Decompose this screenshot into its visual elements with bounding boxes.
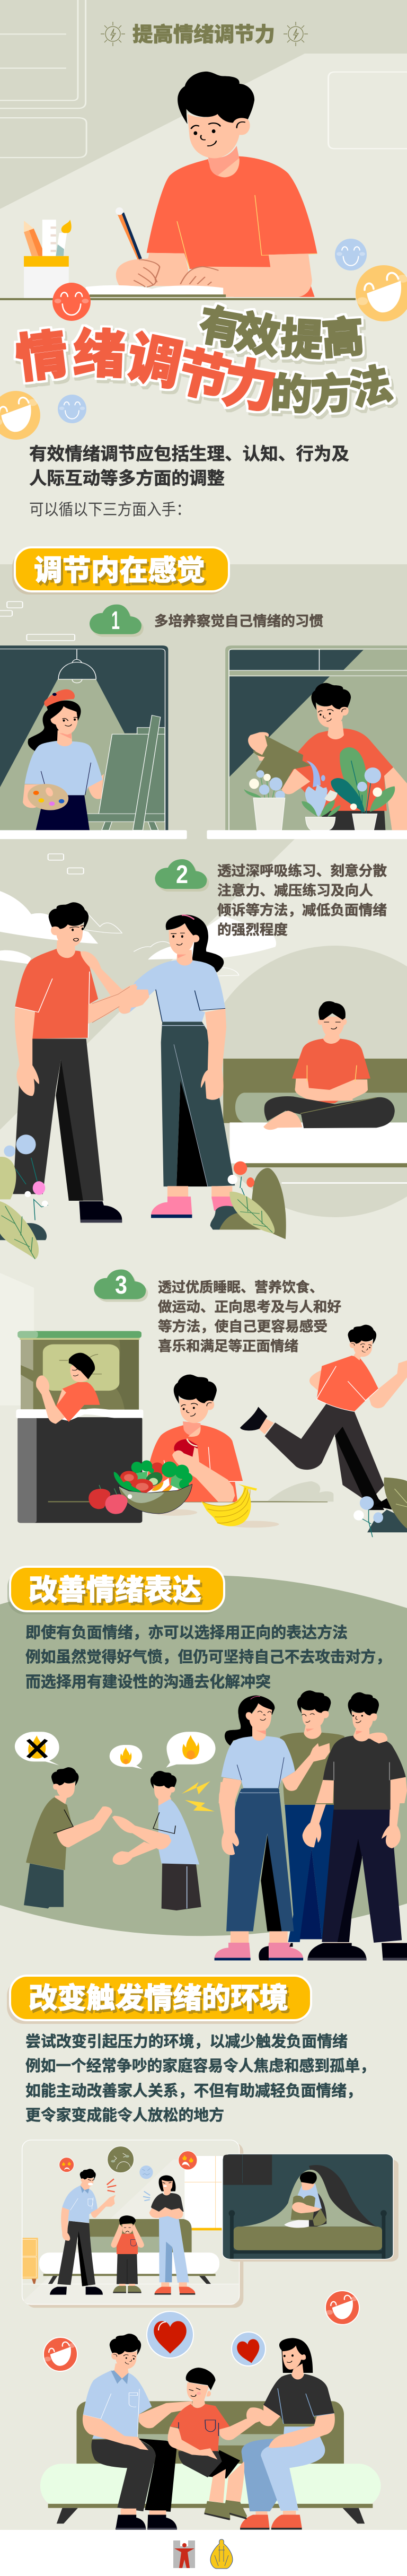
- section three paragraph: 尝试改变引起压力的环境，以减少触发负面情绪: [25, 2033, 348, 2050]
- main title: 节: [171, 342, 235, 411]
- man eating: [143, 1375, 243, 1502]
- illustration: three friends: [215, 1690, 407, 1960]
- man in olive shirt: [280, 1690, 344, 1804]
- palette: [22, 780, 74, 814]
- main title: 效: [232, 307, 283, 363]
- sad child: [284, 2172, 326, 2228]
- speech bubble: small flame: [110, 1745, 142, 1769]
- background: section two sage band: [0, 1575, 407, 1936]
- right arguing man: [151, 1771, 176, 1807]
- step 3 text: 等方法，使自己更容易感受: [158, 1318, 328, 1334]
- woman standing: [81, 915, 235, 1186]
- dad: [83, 2334, 192, 2530]
- section heading: 改变触发情绪的环境: 改变触发情绪的环境: [29, 1983, 288, 2014]
- background: lighter slab: [0, 1273, 34, 1405]
- hero illustration: man writing at desk: [24, 72, 317, 298]
- speech bubble: crossed out flame: [15, 1732, 59, 1766]
- top outlined decoration: [0, 0, 407, 158]
- illustration: man eating with salad and banana: [114, 1375, 257, 1526]
- step 3 badge: [94, 1270, 148, 1302]
- section three paragraph: [25, 2033, 375, 2124]
- intro paragraph: 有效情绪调节应包括生理、认知、行为及: [29, 444, 349, 464]
- meditating man: [263, 1001, 395, 1130]
- section two paragraph: [25, 1624, 391, 1691]
- background: section one band: [0, 564, 407, 1130]
- main title: 的: [269, 370, 313, 418]
- step 2 text: 倾诉等方法，减低负面情绪: [217, 902, 387, 918]
- illustration: arguing pair with speech bubbles: [15, 1732, 216, 1807]
- step 2 text: 透过深呼吸练习、刻意分散: [217, 863, 387, 879]
- plants bottom left: [0, 1134, 48, 1259]
- step 1 text: 多培养察觉自己情绪的习惯: [154, 613, 323, 629]
- step 2 badge: 2: [176, 861, 188, 889]
- icon: lightning bolts: [182, 1781, 215, 1811]
- step 3 text: [158, 1279, 341, 1354]
- background: round hill: [199, 946, 407, 1217]
- logo: yellow hands: [210, 2539, 233, 2569]
- arguing mum: [149, 2175, 195, 2295]
- banana: [201, 1484, 257, 1526]
- step 3 badge: 3: [115, 1271, 127, 1299]
- intro paragraph: 人际互动等多方面的调整: [29, 468, 225, 488]
- main title: 方: [309, 370, 353, 418]
- main title: 力: [218, 352, 281, 421]
- shelf line and soft shadows: [48, 1481, 333, 1527]
- mum: [240, 2338, 335, 2530]
- small outlined decoration: [0, 601, 84, 874]
- emoji: orange laugh: [356, 265, 407, 321]
- man: [116, 72, 317, 297]
- section heading: 改善情绪表达: 改善情绪表达: [29, 1574, 201, 1606]
- step 1 badge: [90, 605, 144, 637]
- salad bowl: [114, 1460, 192, 1514]
- main title: 法: [346, 360, 396, 414]
- emoji: blue worried: [139, 2165, 153, 2179]
- lamp: [58, 649, 96, 683]
- icon: light bulb right: [284, 22, 308, 46]
- clouds behind people: [0, 891, 276, 976]
- illustration: comforting couple: [13, 902, 235, 1222]
- friends lower bodies: [215, 1782, 407, 1960]
- emoji: red smile: [52, 283, 91, 321]
- sofa: [39, 2219, 219, 2284]
- apples: [89, 1485, 128, 1514]
- shouting marks: [107, 2179, 116, 2192]
- plants bottom right of section: [210, 1162, 286, 1239]
- panel: quarrelling family: [22, 2140, 243, 2308]
- man in black shirt: [316, 1692, 407, 1810]
- gardener: [248, 683, 407, 830]
- panel: lonely child under blanket: [223, 2154, 399, 2261]
- emoji: angry red left: [59, 2158, 74, 2172]
- son: [168, 2368, 263, 2520]
- section three paragraph: 更令家变成能令人放松的地方: [25, 2107, 224, 2124]
- friends upper bodies: [219, 1690, 407, 1810]
- emoji: blue smile left: [58, 395, 86, 423]
- arguing man bodies: [24, 1797, 201, 1910]
- illustration: sleeping man in bed: [16, 1331, 143, 1523]
- step 3 text: 透过优质睡眠、营养饮食、: [158, 1279, 323, 1295]
- step 2 text: [217, 863, 387, 938]
- section three paragraph: 如能主动改善家人关系，不但有助减轻负面情绪，: [25, 2082, 362, 2100]
- section two paragraph: 而选择用有建设性的沟通去化解冲突: [25, 1673, 271, 1691]
- step 2 badge: [155, 859, 209, 892]
- easel: [86, 715, 165, 830]
- angry dad: [50, 2169, 116, 2295]
- main title: 高: [320, 313, 366, 363]
- main title: [13, 301, 396, 421]
- icon: heart big: [147, 2311, 193, 2358]
- top label: 提高情绪调节力: 提高情绪调节力: [132, 24, 275, 46]
- window sill left: [0, 830, 187, 839]
- emoji: orange laugh left: [0, 391, 40, 440]
- main title: 绪: [72, 324, 126, 385]
- icon: heart small: [232, 2332, 266, 2366]
- step 2 text: 注意力、减压练习及向人: [217, 883, 373, 898]
- step 3 text: 做运动、正向思考及与人和好: [158, 1299, 341, 1315]
- section two paragraph: 例如虽然觉得好气愤，但仍可坚持自己不去攻击对方，: [25, 1648, 391, 1666]
- painter: [22, 689, 104, 830]
- emoji: red laugh left: [43, 2337, 77, 2371]
- ankles and shoes of woman: [151, 1186, 235, 1218]
- desk line: [0, 298, 356, 300]
- section heading: 调节内在感觉: [12, 547, 229, 595]
- man standing: [13, 902, 122, 1222]
- logo: grey H with red figure: [173, 2540, 195, 2568]
- intro paragraph: [29, 444, 349, 519]
- top label: 提高情绪调节力: [101, 22, 308, 46]
- section heading: 改善情绪表达: [7, 1567, 224, 1614]
- main title: 情: [13, 325, 71, 389]
- emoji: olive frown: [108, 2146, 134, 2173]
- panel: painter window: [0, 645, 187, 839]
- section heading: 改变触发情绪的环境: [7, 1976, 311, 2024]
- window sill right: [207, 830, 407, 839]
- emoji: red laugh right: [325, 2291, 359, 2325]
- section three paragraph: 例如一个经常争吵的家庭容易令人焦虑和感到孤单，: [25, 2057, 375, 2075]
- plants beside runner: [353, 1478, 407, 1537]
- illustration: running man: [240, 1325, 407, 1510]
- emoji: blue smile top: [335, 239, 367, 270]
- background: top diagonal block: [0, 0, 407, 209]
- emoji: angry red right: [179, 2151, 197, 2170]
- step 2 text: 的强烈程度: [217, 922, 288, 938]
- book: [86, 285, 226, 297]
- covering ears son: [111, 2215, 144, 2293]
- intro paragraph: 可以循以下三方面入手：: [29, 501, 191, 519]
- step 1 badge: 1: [111, 607, 120, 635]
- main title: 有: [196, 301, 245, 355]
- sofa: [40, 2401, 381, 2523]
- sleeper: [36, 1353, 100, 1424]
- potted plants: [244, 747, 395, 830]
- icon: light bulb left: [101, 22, 125, 46]
- section two paragraph: 即使有负面情绪，亦可以选择用正向的表达方法: [25, 1624, 348, 1641]
- panel: gardener window: [207, 645, 407, 839]
- speech bubble: large flame: [166, 1732, 216, 1768]
- cabinet: [23, 2238, 38, 2284]
- pencil cup: [24, 220, 72, 298]
- main title: 提: [279, 315, 324, 364]
- illustration: happy family on sofa: [40, 2334, 381, 2530]
- main title: 调: [122, 326, 187, 397]
- woman in blue: [219, 1696, 330, 1803]
- step 3 text: 喜乐和满足等正面情绪: [158, 1338, 298, 1354]
- illustration: bed with meditating man: [223, 1001, 407, 1184]
- footer white band: [0, 2530, 407, 2576]
- left arguing man: [51, 1767, 78, 1805]
- section heading: 调节内在感觉: 调节内在感觉: [34, 555, 205, 587]
